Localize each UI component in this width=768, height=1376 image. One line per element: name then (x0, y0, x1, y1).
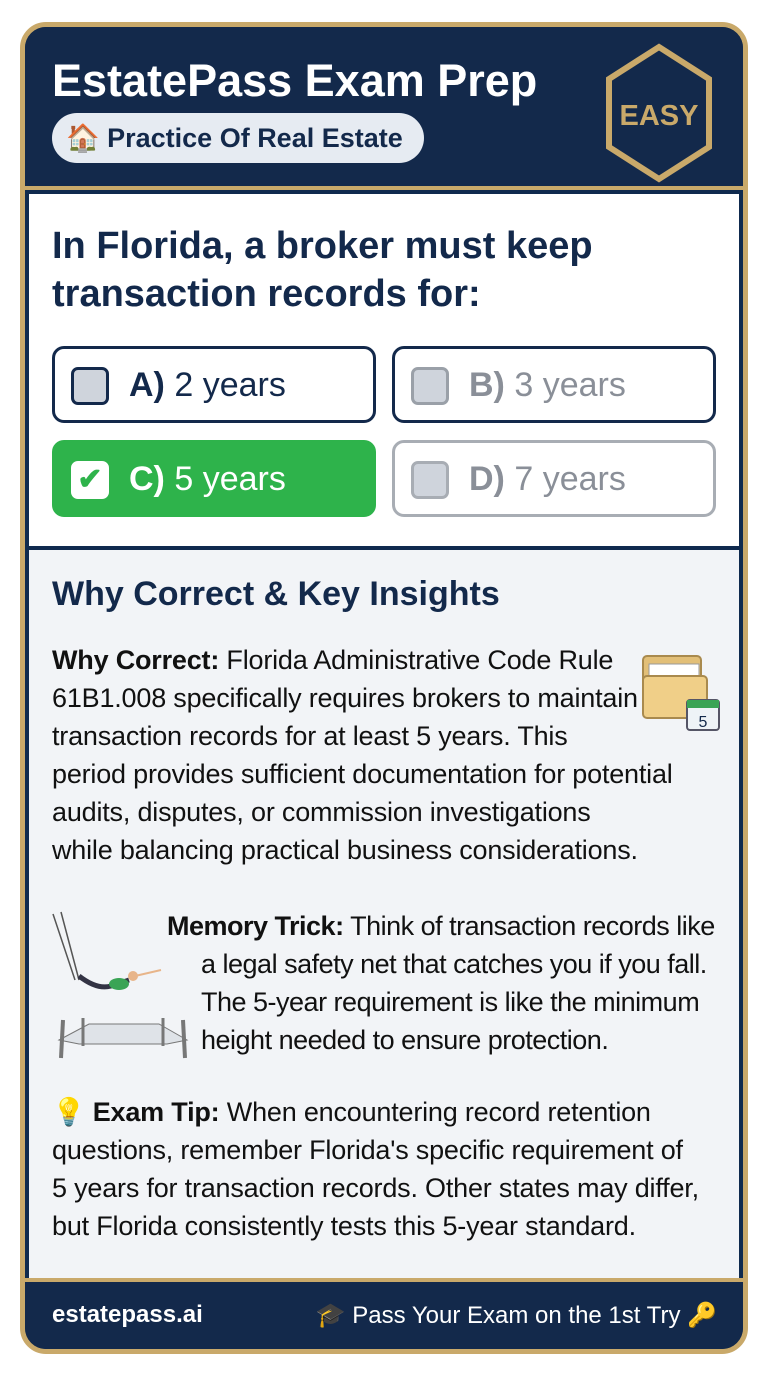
option D (392, 440, 716, 517)
question text (52, 225, 593, 315)
memory trick text: The 5-year requirement is like the minimum (201, 987, 699, 1017)
memory trick text: height needed to ensure protection. (201, 1025, 608, 1055)
footer (25, 1278, 743, 1354)
category pill (52, 113, 424, 163)
question text: transaction records for: (52, 273, 481, 315)
why correct text: transaction records for at least 5 years. This (52, 721, 568, 751)
question text: In Florida, a broker must keep (52, 225, 593, 267)
why correct text: period provides sufficient documentation for potential (52, 759, 673, 789)
why correct text: Why Correct: Florida Administrative Code Rule (52, 645, 613, 675)
memory trick text: a legal safety net that catches you if you fall. (201, 949, 707, 979)
footer brand: estatepass.ai (52, 1301, 203, 1328)
memory trick text (167, 911, 715, 1055)
icon: folder calendar: 5 (699, 714, 708, 731)
header (25, 27, 743, 190)
why correct text: audits, disputes, or commission investigations (52, 797, 591, 827)
insights panel (29, 550, 739, 1278)
exam tip text: 💡 Exam Tip: When encountering record retention (52, 1097, 651, 1127)
badge: easy hexagon: EASY (620, 100, 698, 132)
why correct text (52, 645, 673, 865)
category pill: 🏠 Practice Of Real Estate (66, 123, 403, 153)
option A: A) 2 years (129, 366, 286, 404)
option C correct (52, 440, 376, 517)
option A (52, 346, 376, 423)
exam tip text: but Florida consistently tests this 5-year standard. (52, 1211, 636, 1241)
title: EstatePass Exam Prep (52, 55, 537, 106)
exam tip text: questions, remember Florida's specific requirement of (52, 1135, 683, 1165)
why correct text: 61B1.008 specifically requires brokers to maintain (52, 683, 638, 713)
footer slogan: 🎓 Pass Your Exam on the 1st Try 🔑 (316, 1302, 717, 1329)
insights heading: Why Correct & Key Insights (52, 575, 500, 613)
icon: folder calendar (642, 655, 720, 731)
option B (392, 346, 716, 423)
memory trick text: Memory Trick: Think of transaction records like (167, 911, 715, 941)
exam tip text (52, 1096, 699, 1241)
option D: D) 7 years (469, 460, 626, 498)
option C correct: C) 5 years (129, 460, 286, 498)
exam tip text: 5 years for transaction records. Other states may differ, (52, 1173, 699, 1203)
why correct text: while balancing practical business considerations. (52, 835, 638, 865)
option C correct: ✔ (77, 463, 103, 496)
question panel (29, 194, 739, 546)
icon: trapeze and net (52, 912, 188, 1058)
badge: easy hexagon (606, 44, 712, 182)
option B: B) 3 years (469, 366, 626, 404)
